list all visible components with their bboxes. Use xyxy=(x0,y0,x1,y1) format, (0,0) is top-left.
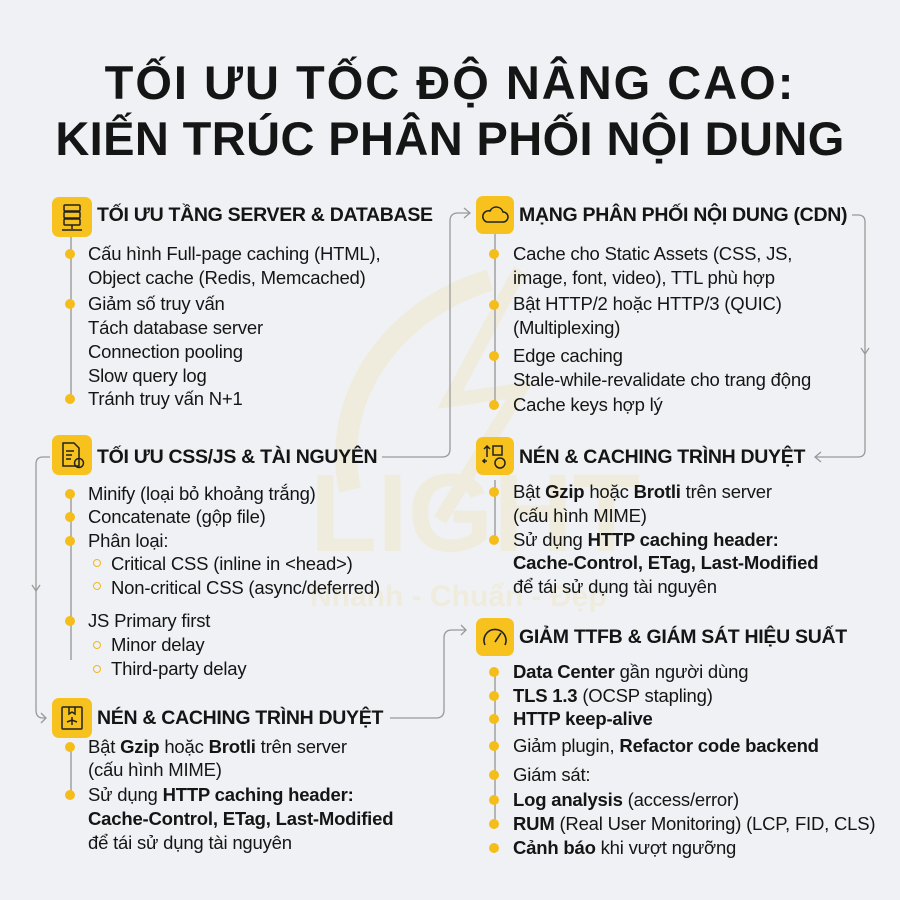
panel: css/js: Minor delay xyxy=(111,634,204,655)
heading: TỐI ƯU CSS/JS & TÀI NGUYÊN xyxy=(97,446,377,468)
panel: css/js: Concatenate (gộp file) xyxy=(88,506,266,527)
panel: TTFB: Giám sát: xyxy=(513,764,590,785)
panel: CDN: Cache keys hợp lý xyxy=(513,394,663,415)
panel: server & database xyxy=(52,197,433,409)
icon: file gear xyxy=(52,435,92,475)
icon: gauge xyxy=(476,618,514,656)
panel: css/js: Third-party delay xyxy=(111,658,246,679)
panel: TTFB: Log analysis (access/error) xyxy=(513,789,739,810)
panel: server & database: Object cache (Redis, Memcached) xyxy=(88,267,366,288)
panel: CDN: Edge caching xyxy=(513,345,623,366)
panel: browser caching left: (cấu hình MIME) xyxy=(88,759,222,780)
panel: CDN: Cache cho Static Assets (CSS, JS, xyxy=(513,243,792,264)
panel: browser caching left: Bật Gzip hoặc Brotli trên server xyxy=(88,736,347,757)
heading: NÉN & CACHING TRÌNH DUYỆT xyxy=(97,707,383,729)
icon: server xyxy=(52,197,92,237)
panel: CDN: Bật HTTP/2 hoặc HTTP/3 (QUIC) xyxy=(513,293,782,314)
heading: MẠNG PHÂN PHỐI NỘI DUNG (CDN) xyxy=(519,204,847,226)
panel: browser caching right: Bật Gzip hoặc Brotli trên server xyxy=(513,481,772,502)
icon: box xyxy=(52,698,92,738)
title: TỐI ƯU TỐC ĐỘ NÂNG CAO: xyxy=(105,56,795,109)
heading: TỐI ƯU TẦNG SERVER & DATABASE xyxy=(97,204,433,226)
watermark: Nhanh - Chuẩn - Đẹp xyxy=(310,580,607,613)
panel: TTFB: RUM (Real User Monitoring) (LCP, FID, CLS) xyxy=(513,813,875,834)
panel: TTFB: HTTP keep-alive xyxy=(513,708,653,729)
panel: server & database: Giảm số truy vấn xyxy=(88,293,225,314)
panel: server & database: Tránh truy vấn N+1 xyxy=(88,388,243,409)
icon: cloud xyxy=(476,196,514,234)
panel: browser caching right: Sử dụng HTTP caching header: xyxy=(513,529,779,550)
panel: CDN xyxy=(476,196,847,415)
panel: TTFB: Giảm plugin, Refactor code backend xyxy=(513,735,819,756)
title: KIẾN TRÚC PHÂN PHỐI NỘI DUNG xyxy=(55,112,845,165)
title xyxy=(55,56,845,165)
panel: browser caching left: Cache-Control, ETag, Last-Modified xyxy=(88,808,393,829)
panel: browser caching right: để tái sử dụng tài nguyên xyxy=(513,576,717,597)
panel: css/js: Non-critical CSS (async/deferred) xyxy=(111,577,380,598)
panel: browser caching left: Sử dụng HTTP caching header: xyxy=(88,784,354,805)
panel: css/js: Minify (loại bỏ khoảng trắng) xyxy=(88,483,316,504)
panel: css/js: Critical CSS (inline in <head>) xyxy=(111,553,353,574)
heading: NÉN & CACHING TRÌNH DUYỆT xyxy=(519,446,805,468)
panel: server & database: Cấu hình Full-page caching (HTML), xyxy=(88,243,380,264)
panel: TTFB: TLS 1.3 (OCSP stapling) xyxy=(513,685,713,706)
panel: TTFB: Data Center gần người dùng xyxy=(513,661,748,682)
panel: browser caching right xyxy=(476,437,818,597)
panel: css/js: Phân loại: xyxy=(88,530,168,551)
panel: server & database: Slow query log xyxy=(88,365,207,386)
panel: css/js xyxy=(52,435,380,679)
panel: TTFB xyxy=(476,618,875,858)
panel: CDN: Stale-while-revalidate cho trang động xyxy=(513,369,811,390)
panel: TTFB: Cảnh báo khi vượt ngưỡng xyxy=(513,837,736,858)
panel: browser caching right: (cấu hình MIME) xyxy=(513,505,647,526)
panel: CDN: (Multiplexing) xyxy=(513,317,620,338)
heading: GIẢM TTFB & GIÁM SÁT HIỆU SUẤT xyxy=(519,626,847,648)
panel: browser caching left xyxy=(52,698,393,853)
watermark xyxy=(310,266,640,613)
panel: server & database: Connection pooling xyxy=(88,341,243,362)
icon: transfer xyxy=(476,437,514,475)
panel: CDN: image, font, video), TTL phù hợp xyxy=(513,267,775,288)
panel: css/js: JS Primary first xyxy=(88,610,210,631)
panel: browser caching left: để tái sử dụng tài nguyên xyxy=(88,832,292,853)
panel: browser caching right: Cache-Control, ETag, Last-Modified xyxy=(513,552,818,573)
watermark: LIGHT xyxy=(310,452,640,575)
panel: server & database: Tách database server xyxy=(88,317,263,338)
